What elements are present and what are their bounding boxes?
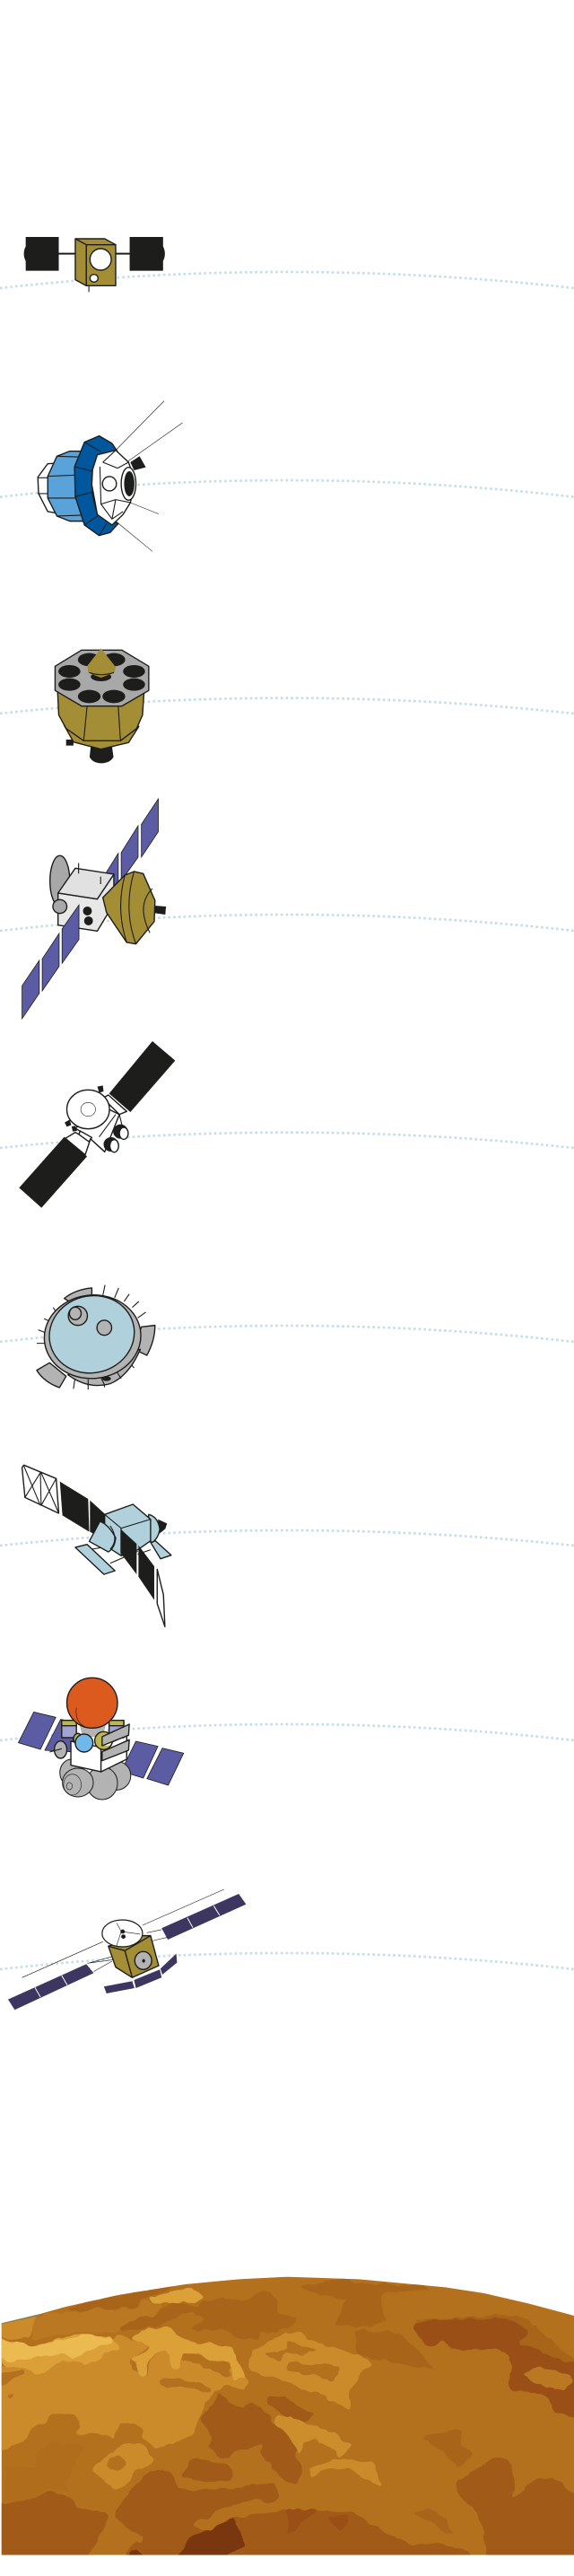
spacecraft 7: light-blue bus with black and wireframe arrays — [22, 1465, 171, 1626]
planet Venus surface — [0, 2262, 574, 2561]
spacecraft 2: blue drum probe with antennas — [38, 401, 183, 551]
spacecraft 6: round blue heat-shield probe — [35, 1285, 155, 1389]
spacecraft 9: gold box, white dish, dark purple arrays — [8, 1889, 246, 2010]
spacecraft 5: white dish with black solar panels — [19, 1041, 175, 1208]
spacecraft 1: gold box with black panels — [24, 237, 165, 292]
spacecraft 3: octagonal gold lander with black nozzles — [55, 648, 149, 763]
spacecraft 4: white bus, purple solar array, gold dish — [22, 799, 166, 1019]
orbit arcs — [0, 272, 574, 1969]
spacecraft 8: orange balloon on white bus with grey tanks — [18, 1678, 184, 1800]
